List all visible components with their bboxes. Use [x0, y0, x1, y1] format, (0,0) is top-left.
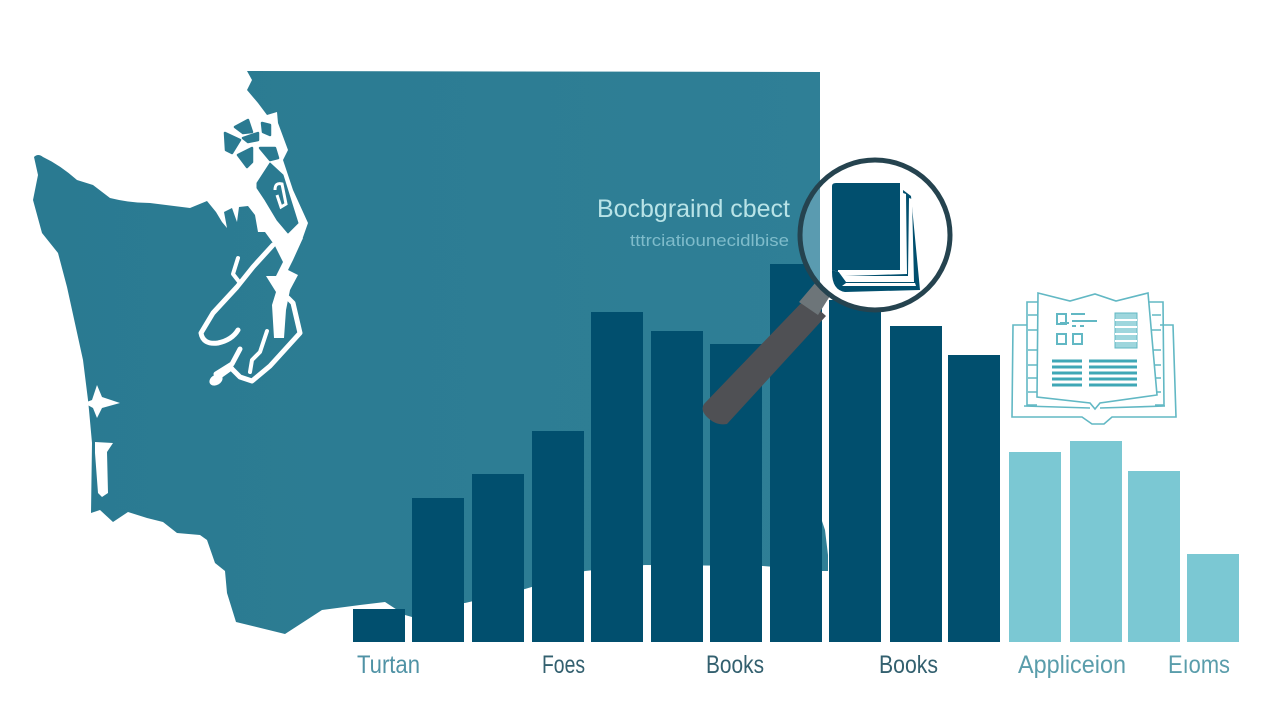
icon: book in lens: [832, 183, 920, 292]
axis labels: Books: [879, 651, 938, 679]
axis labels: Eıoms: [1168, 651, 1230, 679]
axis labels: Books: [706, 651, 764, 679]
axis labels: Turtan: [357, 651, 420, 679]
axis labels: Foes: [542, 651, 585, 679]
subheading: tttrciatiounecidlbise: [630, 231, 789, 250]
lens: [800, 160, 950, 310]
bar chart: light bars: [1009, 441, 1239, 642]
magnifying glass: [703, 160, 950, 424]
heading: Bocbgraind cbect: [597, 195, 790, 223]
handle: [703, 298, 826, 424]
map: Washington state silhouette: [33, 71, 828, 634]
axis labels: Appliceion: [1018, 651, 1126, 679]
map: Puget Sound waterways: [201, 238, 303, 388]
icon: miniature page charts: [1052, 313, 1137, 385]
icon: open book with charts: [1012, 293, 1176, 424]
map: Grays Harbor and Willapa Bay inlets: [84, 385, 120, 497]
bar chart: dark bars: [353, 264, 1000, 642]
axis labels: [357, 651, 1230, 679]
map: San Juan islands and Whidbey island: [225, 120, 298, 233]
